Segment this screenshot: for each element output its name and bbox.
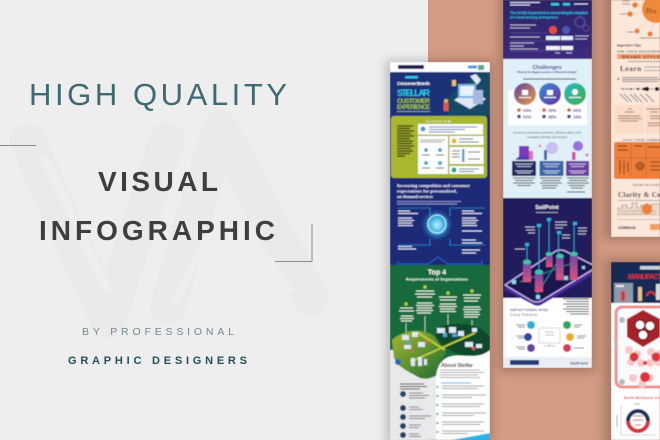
poster 2 sailpoint section: SailPoint bbox=[535, 205, 559, 211]
icon: isometric desk illustration bbox=[444, 74, 486, 111]
poster 2 challenges section: Growing competitive pressure, thinking about new bbox=[513, 130, 582, 134]
poster 1 section heading: expectations for personalized, bbox=[397, 188, 457, 194]
poster 2: challenges and sailpoint bbox=[503, 0, 597, 368]
poster 2 challenges section: 52% bbox=[523, 114, 532, 120]
poster 1 hero: STELLAR bbox=[397, 88, 430, 99]
poster 2 top navy section bbox=[503, 0, 592, 59]
poster 4 header bbox=[611, 262, 660, 303]
poster 4 donut chart bbox=[617, 404, 655, 435]
poster 2 white section content bbox=[503, 299, 592, 368]
poster 1 header bar bbox=[390, 62, 490, 72]
poster 4 red frame and hexagon chart bbox=[614, 307, 660, 388]
poster 1 about stellar: About Stellar bbox=[441, 363, 474, 369]
poster 2 white section content: SailPoint bbox=[570, 360, 589, 366]
poster 4: manufacturing bbox=[611, 262, 660, 440]
poster 2 white section content: SailPoint Predictive Identity bbox=[510, 308, 548, 312]
icon: isometric phone platform bbox=[504, 270, 592, 306]
poster 1 lower left list bbox=[400, 384, 431, 438]
poster 1 green section bbox=[390, 265, 490, 379]
poster 2 challenges section: managing identity and access bbox=[527, 135, 568, 139]
island: dark right land bbox=[436, 324, 490, 355]
poster 2 challenges section: 44% bbox=[523, 108, 532, 113]
poster 1 lower left background bbox=[390, 345, 440, 440]
poster 2 challenges section: Challenges bbox=[532, 65, 562, 71]
poster 3 tips heading bbox=[617, 44, 660, 82]
heading: visual: VISUAL bbox=[98, 166, 218, 197]
white lower background behind phone bbox=[503, 297, 592, 358]
poster 3 tip cards: AVOID THESE COMMON bbox=[623, 139, 660, 142]
poster 3 tips heading: Learn bbox=[620, 64, 642, 73]
poster 1 section heading bbox=[397, 183, 470, 204]
poster 2 challenges section: 35% bbox=[548, 108, 557, 113]
poster 1 section heading: on-demand services bbox=[397, 194, 433, 199]
poster 2 challenges section bbox=[503, 59, 592, 198]
poster 3: brand style tips bbox=[611, 0, 660, 237]
poster 3 brand diagram: Bra bbox=[646, 7, 657, 15]
decorative corner line: top left bbox=[0, 145, 36, 146]
poster 3 brand diagram bbox=[620, 0, 660, 38]
poster 2 challenges section: What are the biggest security or IT/financial change? bbox=[517, 70, 577, 74]
poster 3 clarity section: COOPERHOUSE bbox=[618, 226, 637, 230]
icon: challenge circle two bbox=[539, 83, 561, 105]
poster 1 hero bbox=[390, 72, 490, 116]
poster 1 hero: CUSTOMER bbox=[397, 98, 430, 105]
subheading: by professional: BY PROFESSIONAL bbox=[82, 326, 234, 338]
poster 3 clarity section bbox=[617, 184, 660, 230]
poster 1 section heading: Increasing competition and consumer bbox=[397, 183, 470, 188]
poster 2 challenges section: 48% bbox=[548, 114, 557, 120]
watermark logo bbox=[28, 128, 310, 320]
poster 1 about stellar bbox=[436, 350, 490, 440]
poster 2 white section content: Cloud Platform bbox=[510, 313, 537, 317]
poster 3 timeline dots bbox=[620, 87, 660, 102]
icon: challenge circle three bbox=[564, 83, 586, 105]
heading: infographic: INFOGRAPHIC bbox=[39, 215, 275, 246]
poster 1 orb diagram bbox=[398, 208, 485, 264]
poster 1 hero: EXPERIENCE bbox=[397, 105, 430, 111]
icon: challenge circle one bbox=[514, 83, 536, 105]
poster 3 tips heading: Important Tips bbox=[617, 44, 641, 48]
poster 2 sailpoint section bbox=[503, 198, 592, 358]
subheading: graphic designers: GRAPHIC DESIGNERS bbox=[68, 355, 247, 367]
poster 1: stellar customer experience bbox=[390, 62, 490, 440]
poster 2 top navy section: of cloud among enterprises bbox=[510, 16, 558, 20]
poster 1 overview panel bbox=[391, 116, 487, 178]
poster 1 green section: Requirements of Organizations bbox=[406, 276, 469, 282]
island: olive left land bbox=[392, 331, 446, 379]
poster 2 challenges section: 45% bbox=[573, 108, 582, 113]
poster shadows bbox=[386, 0, 660, 440]
poster 1 green section: Top 4 bbox=[428, 270, 446, 276]
poster 1 overview panel: OVERVIEW bbox=[426, 120, 452, 124]
poster 2 top navy section: The COVID-19 pandemic is accelerating the adoption bbox=[510, 11, 589, 15]
poster 1 hero: Consumer Brands bbox=[397, 81, 430, 86]
poster 3 tips heading: BRAND STYLE bbox=[622, 54, 660, 60]
poster 3 orange panel bbox=[614, 142, 660, 179]
poster 3 tip cards bbox=[614, 105, 660, 142]
heading: high quality: HIGH QUALITY bbox=[29, 77, 287, 112]
poster 2 challenges section: 34% bbox=[573, 114, 582, 120]
decorative corner bracket: bottom right bbox=[275, 224, 312, 262]
